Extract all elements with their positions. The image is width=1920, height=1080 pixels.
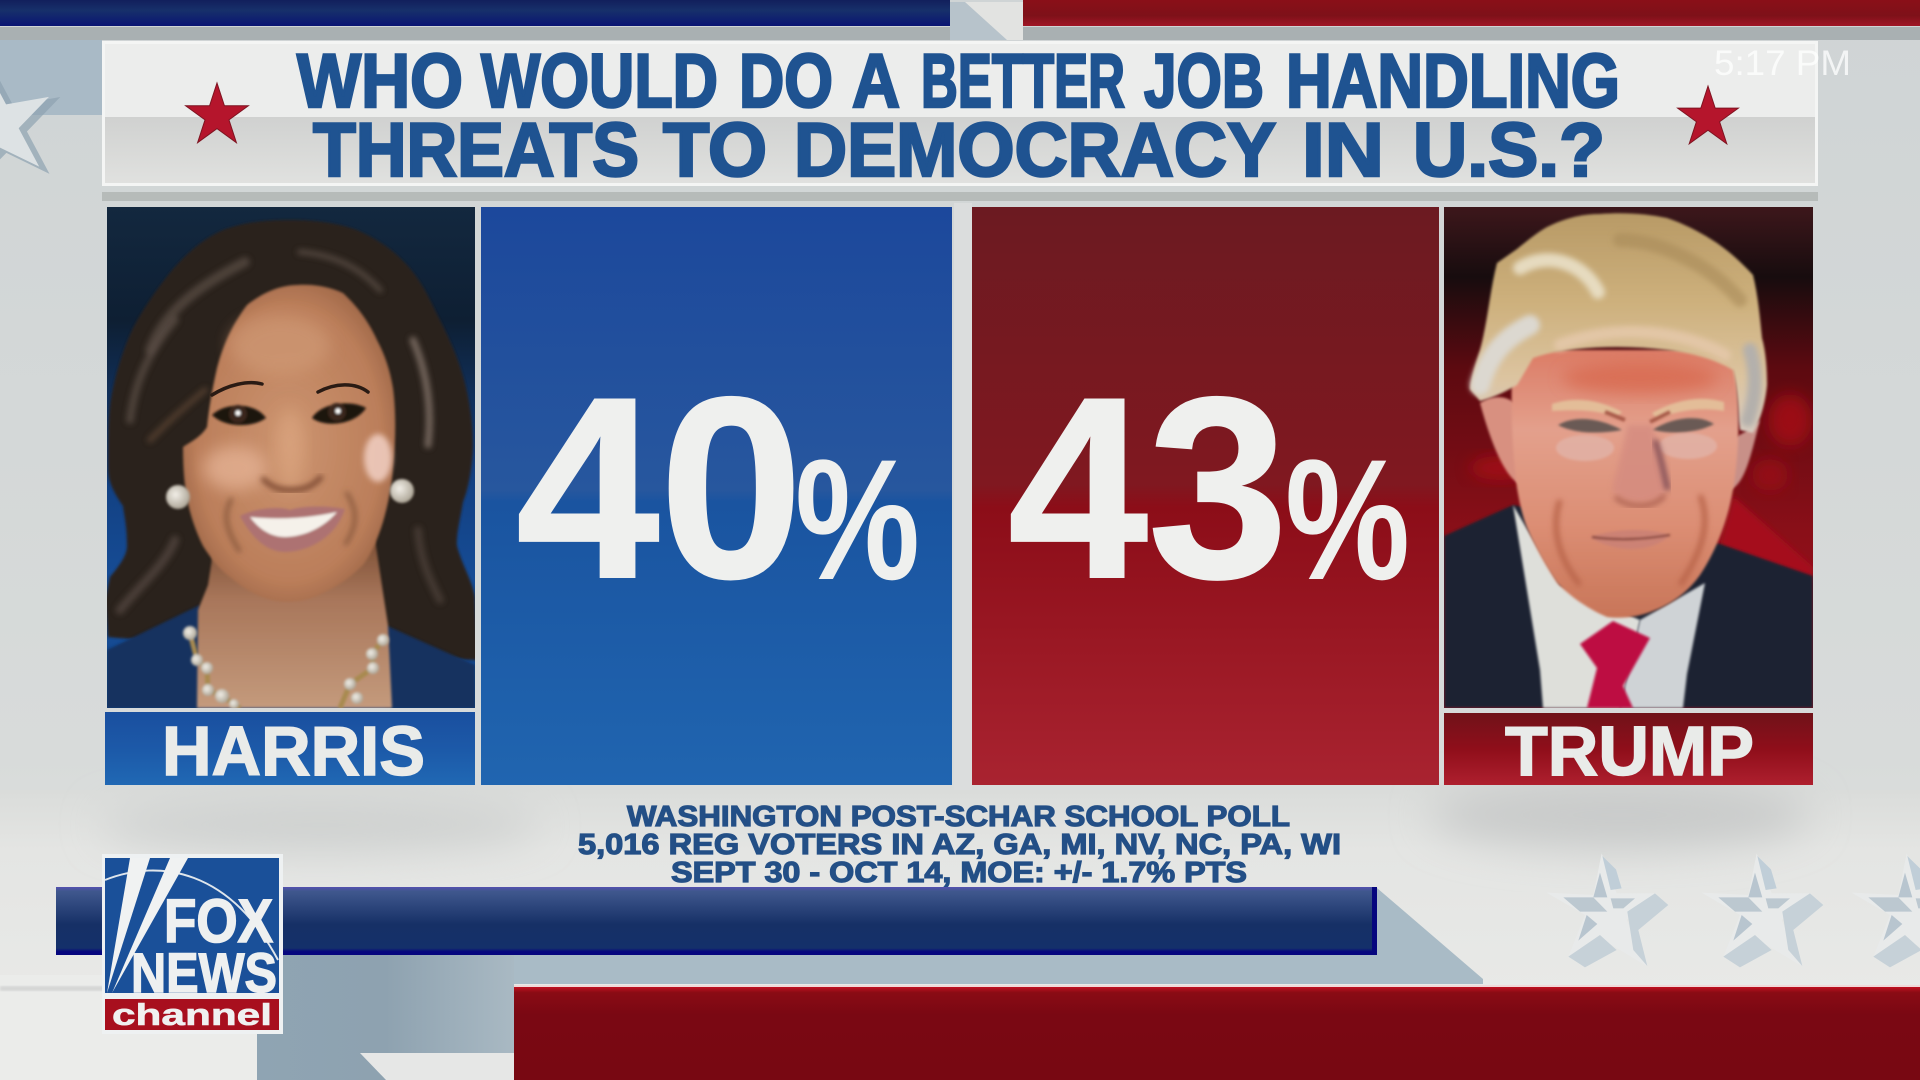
timestamp: 5:17 PM: [1714, 44, 1851, 83]
face: [1512, 350, 1738, 618]
title text: [297, 39, 1620, 193]
hair: [1470, 213, 1767, 433]
jowl lines: [1556, 495, 1705, 585]
mouth: [1590, 530, 1670, 549]
eyes: [212, 403, 366, 425]
red band: [514, 985, 1920, 1080]
dress: [107, 605, 475, 708]
label: Harris: HARRIS: [162, 712, 425, 790]
icon: red star right: [1678, 86, 1738, 144]
brows: [212, 383, 368, 395]
source note: SEPT 30 - OCT 14, MOE: +/- 1.7% PTS: [671, 857, 1247, 889]
back hair: [105, 220, 478, 660]
panel: Trump portrait: [1444, 207, 1813, 708]
source note: 5,016 REG VOTERS IN AZ, GA, MI, NV, NC, PA, WI: [578, 829, 1341, 861]
necklace: [183, 626, 389, 709]
title text: WHO: [297, 39, 463, 124]
logo: Fox News Channel: NEWS: [131, 941, 277, 1004]
panel: Harris bar: %: [795, 424, 920, 616]
title text: U.S.?: [1413, 108, 1605, 193]
smile lines: [226, 492, 355, 552]
title text: TO: [663, 108, 767, 193]
panel: Harris portrait: [107, 207, 475, 708]
title text: THREATS: [313, 108, 639, 193]
earrings: [166, 479, 414, 509]
panel: Trump bar: [972, 207, 1439, 785]
ears: [1478, 396, 1518, 484]
title text: A: [852, 39, 900, 124]
title text: IN: [1302, 108, 1384, 193]
logo: Fox News Channel: [102, 854, 283, 1034]
embossed stars: [1547, 853, 1920, 967]
title text: WOULD: [481, 39, 718, 124]
logo: Fox News Channel: FOX: [164, 887, 273, 955]
hair streaks: [1480, 240, 1755, 420]
hair shine: [120, 252, 440, 610]
nose: [1618, 425, 1660, 488]
top bar: red: [1023, 0, 1920, 26]
neck and chest: [197, 540, 392, 708]
title text: DO: [739, 39, 833, 124]
blue band: [56, 887, 1377, 955]
suit: [1444, 505, 1813, 708]
panel: Harris bar: [481, 207, 952, 785]
collar: [1513, 505, 1640, 708]
face: [183, 285, 395, 602]
eyes: [1556, 412, 1717, 461]
decorative star, top left: [0, 52, 73, 191]
icon: red star left: [186, 83, 248, 143]
source note: [578, 801, 1341, 889]
top bar: blue: [0, 0, 950, 26]
forehead flush: [1562, 362, 1718, 394]
cheek highlights: [203, 446, 267, 490]
nose: [262, 476, 322, 490]
label: Trump: [1444, 712, 1813, 790]
panel: Trump bar: %: [1285, 424, 1410, 616]
title text: DEMOCRACY: [794, 108, 1276, 193]
mouth: [240, 506, 345, 552]
brows: [1552, 399, 1724, 419]
title text: BETTER: [921, 39, 1125, 124]
logo: Fox News Channel: channel: [112, 997, 272, 1032]
panel: title banner: [102, 39, 1818, 201]
value: 43%: 43: [1008, 343, 1288, 632]
value: 40%: 40: [516, 343, 803, 632]
tie: [1580, 621, 1650, 708]
label: Trump: TRUMP: [1505, 712, 1754, 790]
title text: HANDLING: [1286, 39, 1620, 124]
title text: JOB: [1144, 39, 1264, 124]
source note: WASHINGTON POST-SCHAR SCHOOL POLL: [627, 801, 1290, 833]
